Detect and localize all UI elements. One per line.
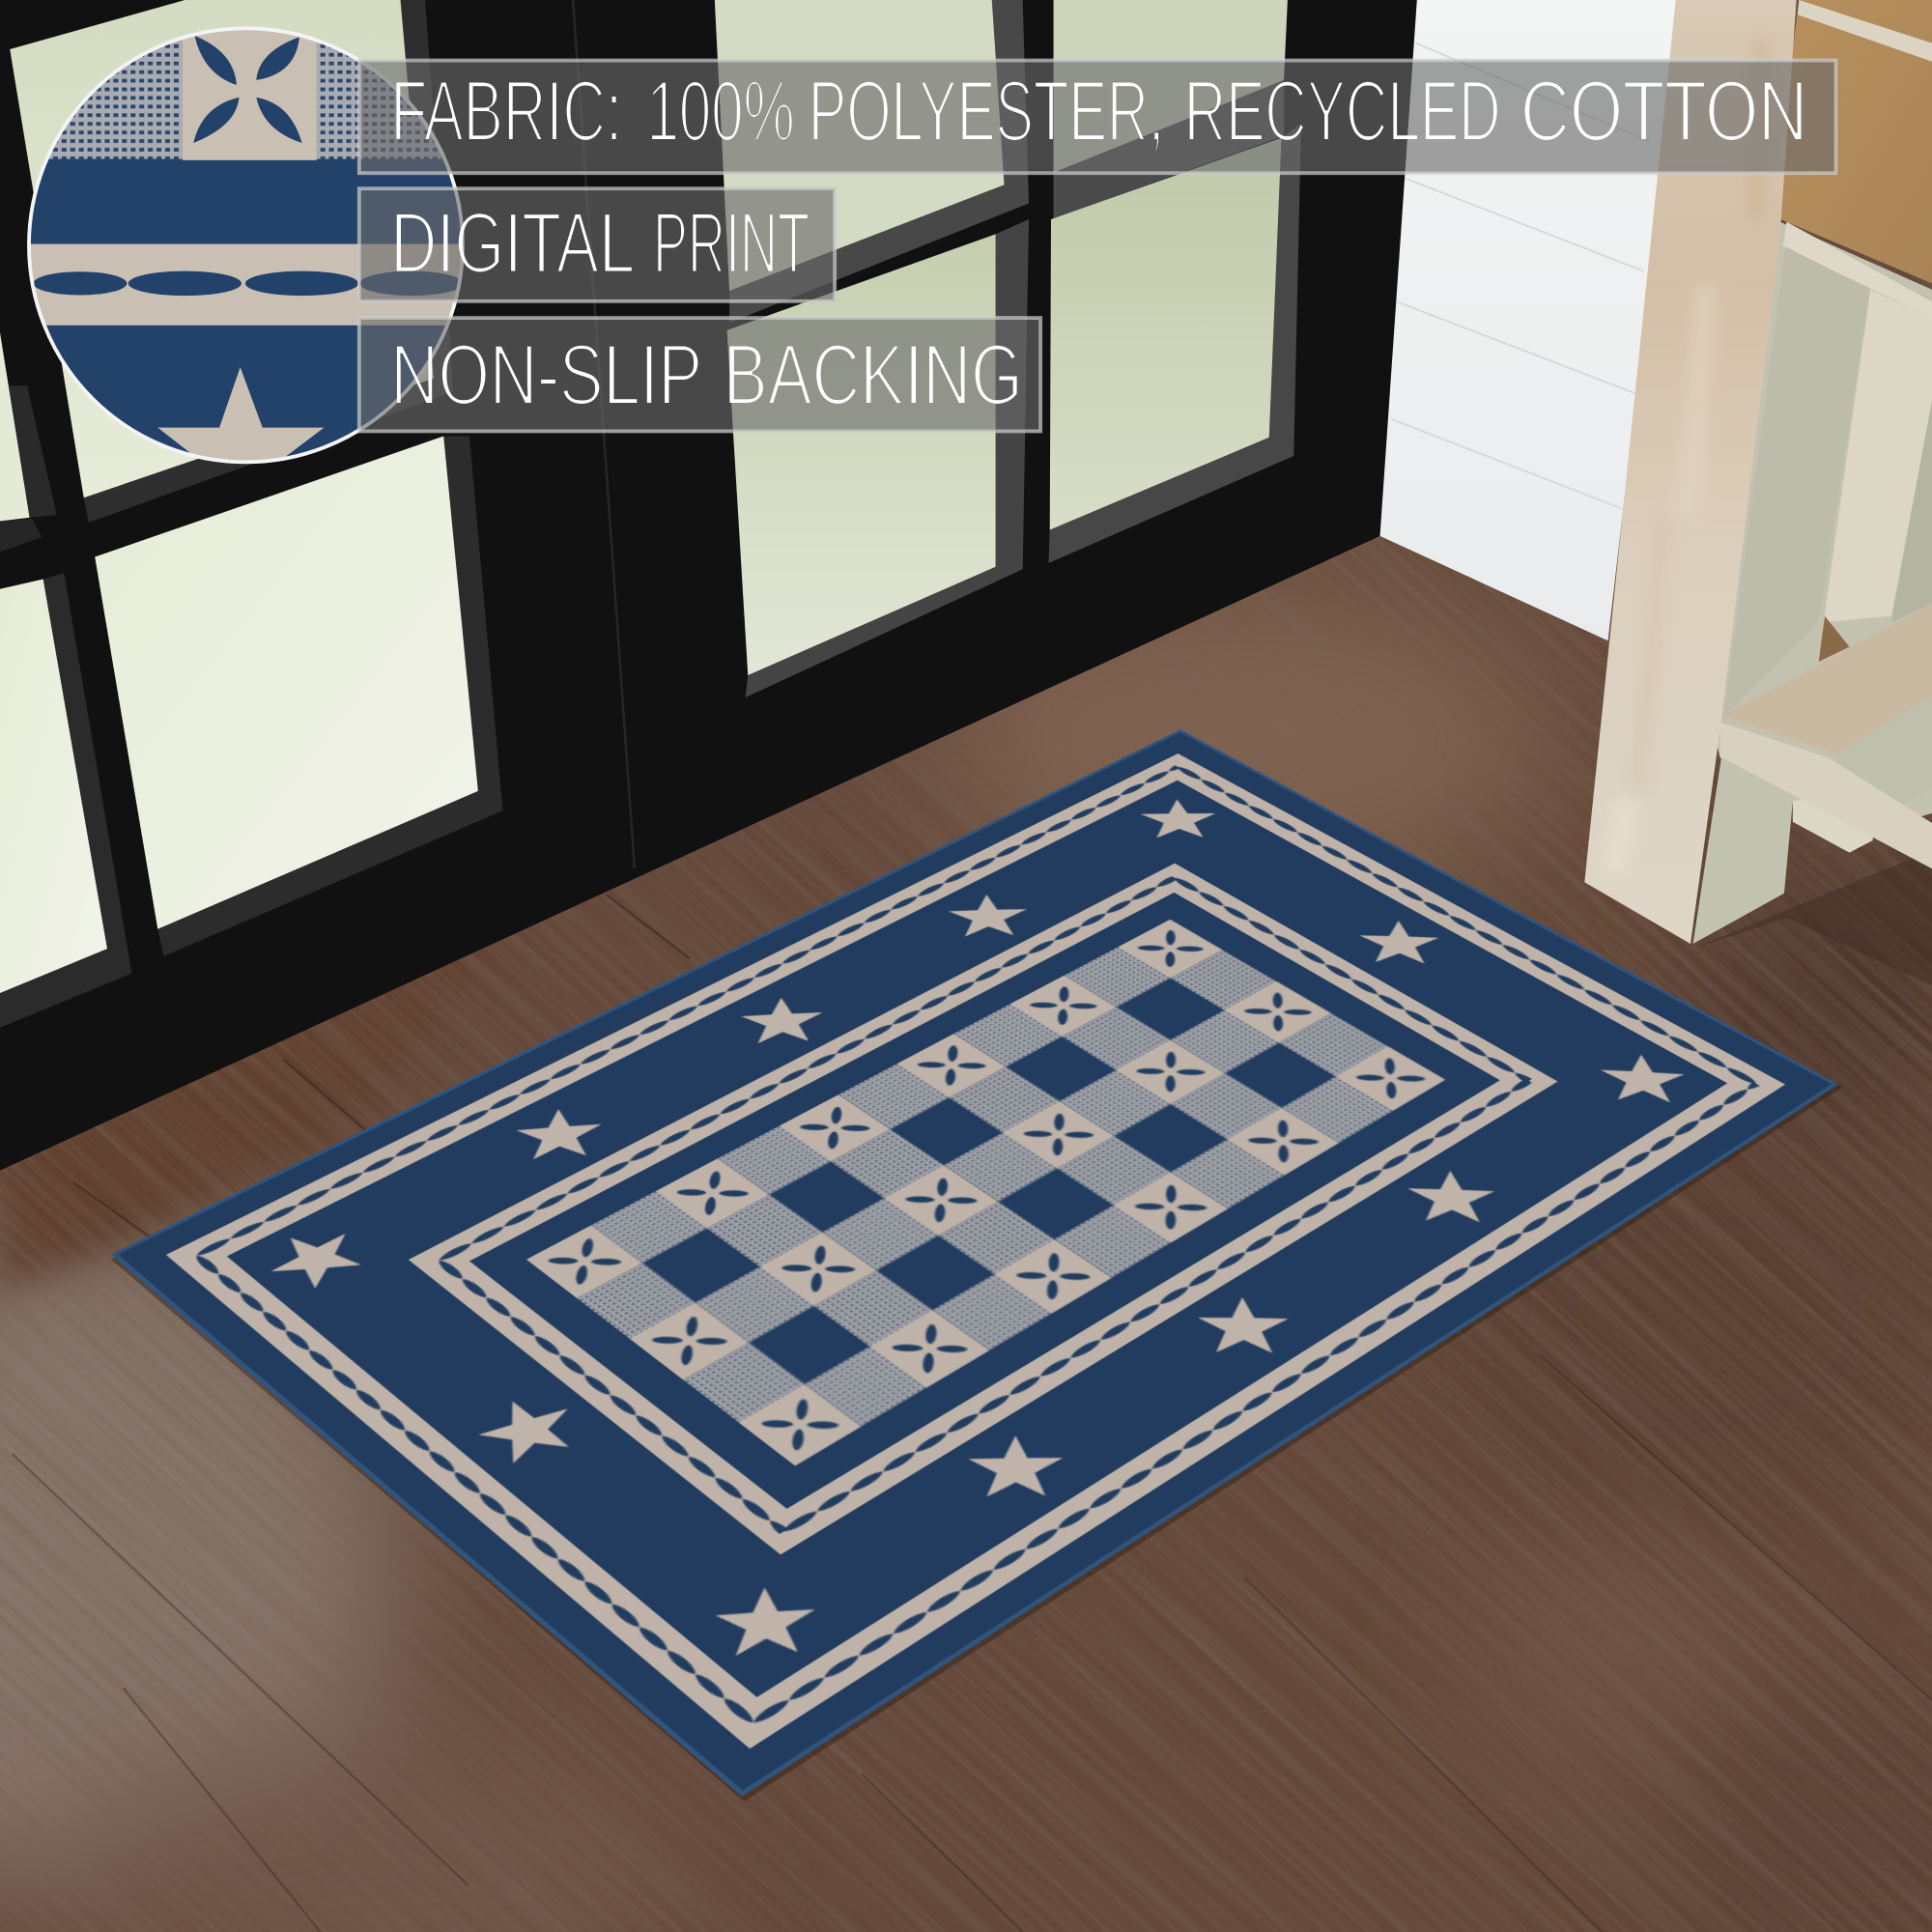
left door panes xyxy=(0,0,502,1028)
detail circle: fabric close-up xyxy=(29,28,464,462)
door split line xyxy=(573,0,635,868)
checkerboard centre xyxy=(526,920,1446,1466)
wooden bench xyxy=(1584,0,1932,985)
label: digital print: PRINT xyxy=(653,194,810,291)
rug shadow xyxy=(111,734,1843,1802)
label: digital print xyxy=(359,188,835,301)
star xyxy=(157,367,324,462)
floor shade under bench xyxy=(1693,850,1932,985)
label: fabric: FABRIC: xyxy=(390,62,622,158)
label: fabric: RECYCLED xyxy=(1184,62,1501,158)
side panels xyxy=(1723,246,1870,717)
cream stripe with lens chain xyxy=(30,244,464,326)
label: fabric: POLYESTER, xyxy=(809,62,1164,158)
label: fabric: COTTON xyxy=(1520,62,1807,158)
overlay: detail circle and feature labels xyxy=(27,26,1837,464)
inner border xyxy=(409,864,1558,1554)
label: non-slip backing xyxy=(359,318,1040,431)
back leg xyxy=(1793,788,1873,853)
label: digital print: DIGITAL xyxy=(390,194,635,291)
stars xyxy=(232,780,1724,1690)
label: fabric xyxy=(359,60,1836,173)
white shiplap wall xyxy=(1380,0,1682,640)
right door panes xyxy=(715,0,1301,697)
top wood panel xyxy=(1772,0,1932,283)
side panel backing xyxy=(1713,219,1932,838)
label: non-slip backing: NON-SLIP xyxy=(390,326,702,422)
cream square with flower xyxy=(183,30,317,160)
shelf xyxy=(1836,696,1932,826)
rug base xyxy=(114,731,1835,1793)
front leg side xyxy=(1693,757,1793,944)
rug in perspective xyxy=(111,729,1837,1797)
label: fabric: 100% xyxy=(647,62,795,158)
gingham strip xyxy=(48,40,441,159)
front rail xyxy=(1720,722,1932,868)
outer border xyxy=(166,753,1785,1748)
black door frame xyxy=(0,0,1417,1171)
front leg face xyxy=(1584,0,1797,944)
label: non-slip backing: BACKING xyxy=(724,326,1023,422)
